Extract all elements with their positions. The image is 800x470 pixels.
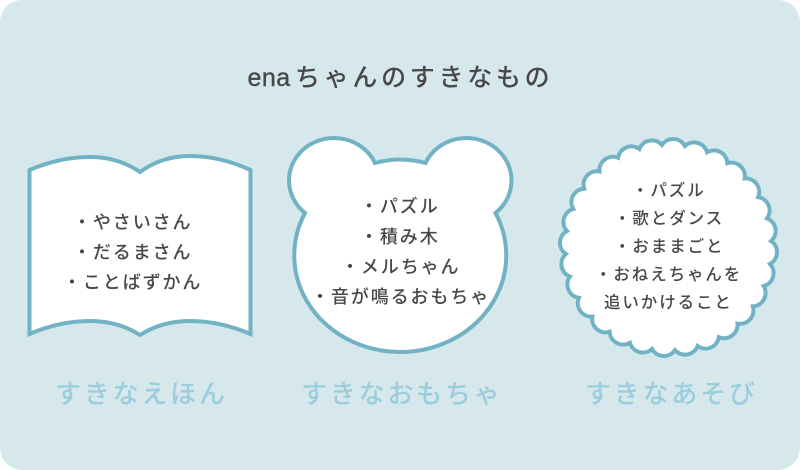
label: games: すきなあそび [585, 379, 758, 409]
label: toys: すきなおもちゃ [301, 379, 503, 409]
play list: ・おままごと [614, 237, 724, 256]
play list: ・歌とダンス [614, 208, 724, 228]
icon: open book [30, 156, 250, 335]
toy list: ・音が鳴るおもちゃ [311, 286, 490, 307]
toy list: ・パズル [360, 196, 440, 216]
label: picture books: すきなえほん [55, 379, 228, 409]
book list: ・やさいさん [73, 212, 192, 232]
play list: 追いかけること [604, 293, 733, 312]
title: ena [248, 64, 291, 92]
book list: ・だるまさん [73, 242, 192, 262]
toy list: ・メルちゃん [341, 257, 460, 277]
book list: ・ことばずかん [63, 272, 202, 292]
panel: favourite toys [289, 138, 512, 409]
panel: favourite games [555, 134, 782, 409]
toy list: ・積み木 [360, 227, 440, 247]
panel: favourite picture books [30, 156, 250, 409]
icon: bear head [289, 138, 512, 352]
icon: scalloped circle [555, 134, 782, 361]
play list: ・おねえちゃんを [595, 265, 742, 284]
play list: ・パズル [632, 180, 706, 200]
title: ちゃんのすきなもの [295, 64, 553, 92]
